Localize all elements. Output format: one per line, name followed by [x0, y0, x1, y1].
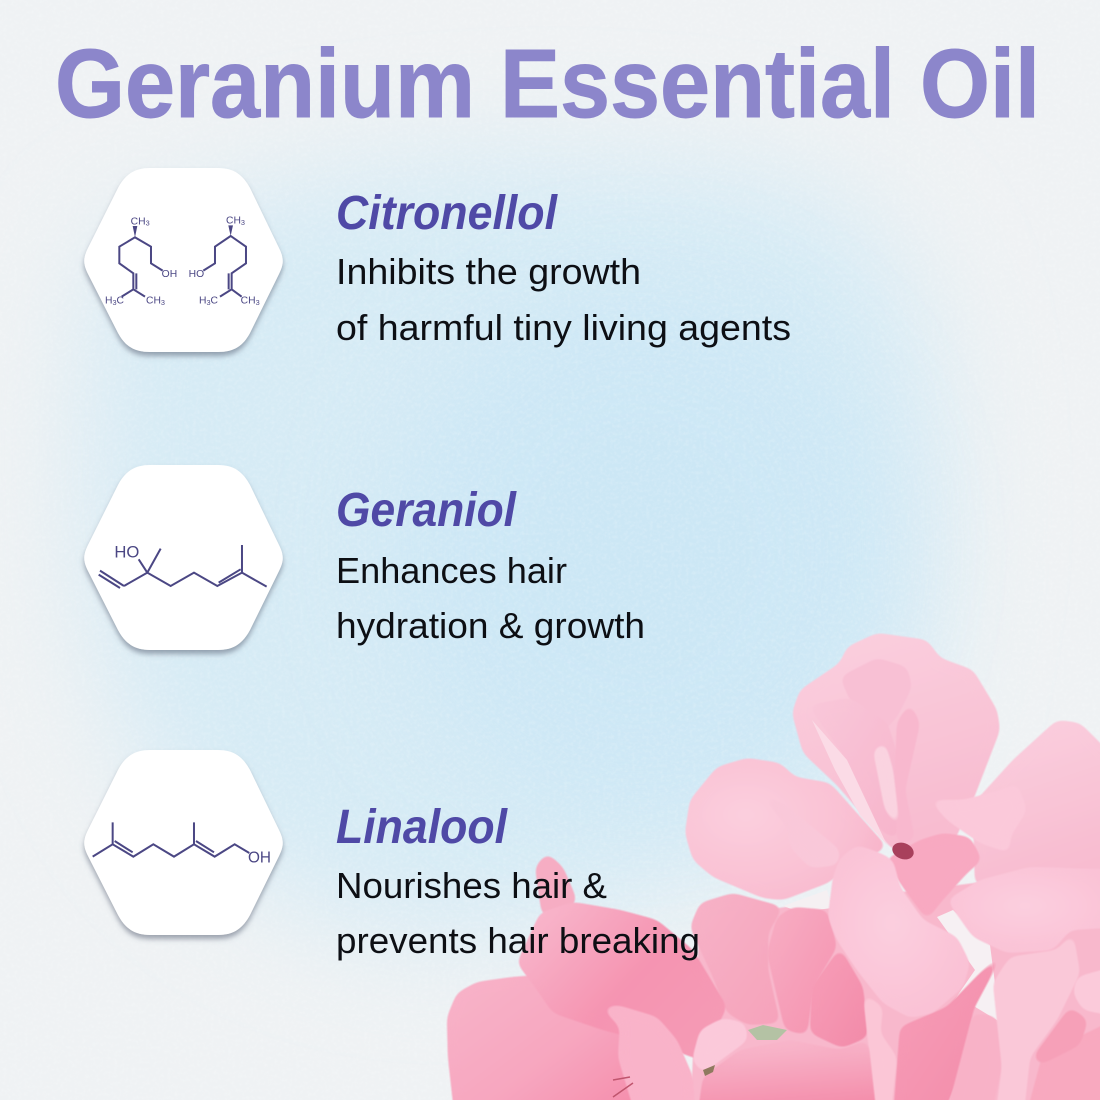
petal: small lower — [602, 1005, 695, 1100]
petal: bottom centre — [697, 1040, 877, 1100]
chemical structure: citronellol: CH — [241, 296, 256, 307]
petal: lower left large — [447, 975, 640, 1100]
icon: stamen strokes — [613, 1077, 633, 1097]
icon: green sepal — [748, 1025, 787, 1040]
text: Geraniol description: Enhances hair — [336, 550, 567, 591]
icon: hexagon — [84, 168, 283, 352]
petal: right middle — [947, 867, 1100, 953]
petal: fold highlight 2 — [873, 742, 900, 830]
petal: pink backing of lower flower — [690, 880, 1100, 1100]
petal: light right column — [993, 933, 1080, 1100]
chemical structure: citronellol: 3 — [161, 298, 165, 307]
text: Citronellol description: of harmful tiny living agents — [336, 307, 791, 348]
chemical structure: linalool panel molecule: OH — [248, 849, 271, 866]
chemical structure: citronellol: CH — [131, 216, 146, 227]
petal: top silhouette — [792, 633, 1000, 850]
petal: back C — [810, 948, 868, 1048]
icon: dark flower centre — [890, 840, 916, 862]
chemical structure: citronellol: H — [105, 296, 112, 307]
text: Linalool description: Nourishes hair & — [336, 865, 607, 906]
heading: Citronellol: Citronellol — [336, 187, 559, 240]
petal: lower right second — [945, 1013, 1002, 1100]
text: Geraniol description: hydration & growth — [336, 605, 645, 646]
petal: fold highlight — [812, 720, 887, 845]
petal: pale gap left of centre — [783, 890, 832, 912]
petal: back B — [767, 907, 837, 1035]
chemical structure: citronellol: C — [211, 296, 219, 307]
text: Linalool description: prevents hair breaking — [336, 920, 700, 961]
petal: top inner cup — [840, 658, 912, 735]
chemical structure: citronellol: CH — [146, 296, 161, 307]
chemical structure: citronellol — [105, 216, 260, 307]
petal: spike — [535, 853, 577, 920]
chemical structure: citronellol: 3 — [206, 298, 211, 307]
chemical structure: citronellol: 3 — [241, 218, 245, 227]
chemical structure: geraniol panel molecule: HO — [114, 542, 139, 561]
petal: inner top right — [923, 783, 1027, 853]
petal: lower right pink — [893, 950, 1005, 1100]
chemical structure: citronellol: CH — [226, 216, 241, 227]
chemical structure: citronellol: C — [117, 296, 125, 307]
petal: back A — [690, 893, 783, 1025]
panel: Geraniol — [84, 465, 645, 650]
flower: geranium blossoms — [447, 633, 1100, 1100]
petal: right large — [973, 720, 1100, 885]
petal: top right fold — [895, 703, 920, 845]
chemical structure: linalool panel molecule — [93, 822, 271, 866]
petal: dark right — [1033, 1007, 1088, 1065]
text: Citronellol description: Inhibits the growth — [336, 251, 641, 292]
petal: narrow light — [863, 993, 897, 1100]
chemical structure: citronellol: HO — [189, 269, 204, 280]
panel: Linalool — [84, 750, 700, 961]
chemical structure: citronellol: H — [199, 296, 206, 307]
petal: top centre fold — [808, 698, 900, 840]
title: Geranium Essential Oil — [55, 29, 1040, 138]
petal: far right edge — [1073, 965, 1100, 1017]
heading: Geraniol: Geraniol — [336, 484, 518, 537]
heading: Linalool: Linalool — [336, 801, 509, 854]
icon: hexagon — [84, 465, 283, 650]
petal: left fold — [760, 793, 840, 868]
petal: centre front — [828, 845, 970, 1018]
icon: hexagon — [84, 750, 283, 935]
panel: Citronellol — [84, 168, 791, 352]
chemical structure: citronellol: OH — [162, 269, 177, 280]
petal: inner centre — [885, 833, 982, 920]
petal: small centre — [692, 1018, 748, 1073]
petal: far lower right — [1025, 1017, 1100, 1100]
chemical structure: citronellol: 3 — [112, 298, 117, 307]
petal: lower upper — [517, 902, 727, 1060]
chemical structure: geraniol panel molecule — [99, 542, 267, 588]
icon: brown speck — [703, 1065, 715, 1076]
chemical structure: citronellol: 3 — [146, 219, 150, 228]
petal: pale gap right of centre — [937, 910, 1000, 1022]
petal: left — [685, 758, 887, 900]
chemical structure: citronellol: 3 — [256, 298, 260, 307]
